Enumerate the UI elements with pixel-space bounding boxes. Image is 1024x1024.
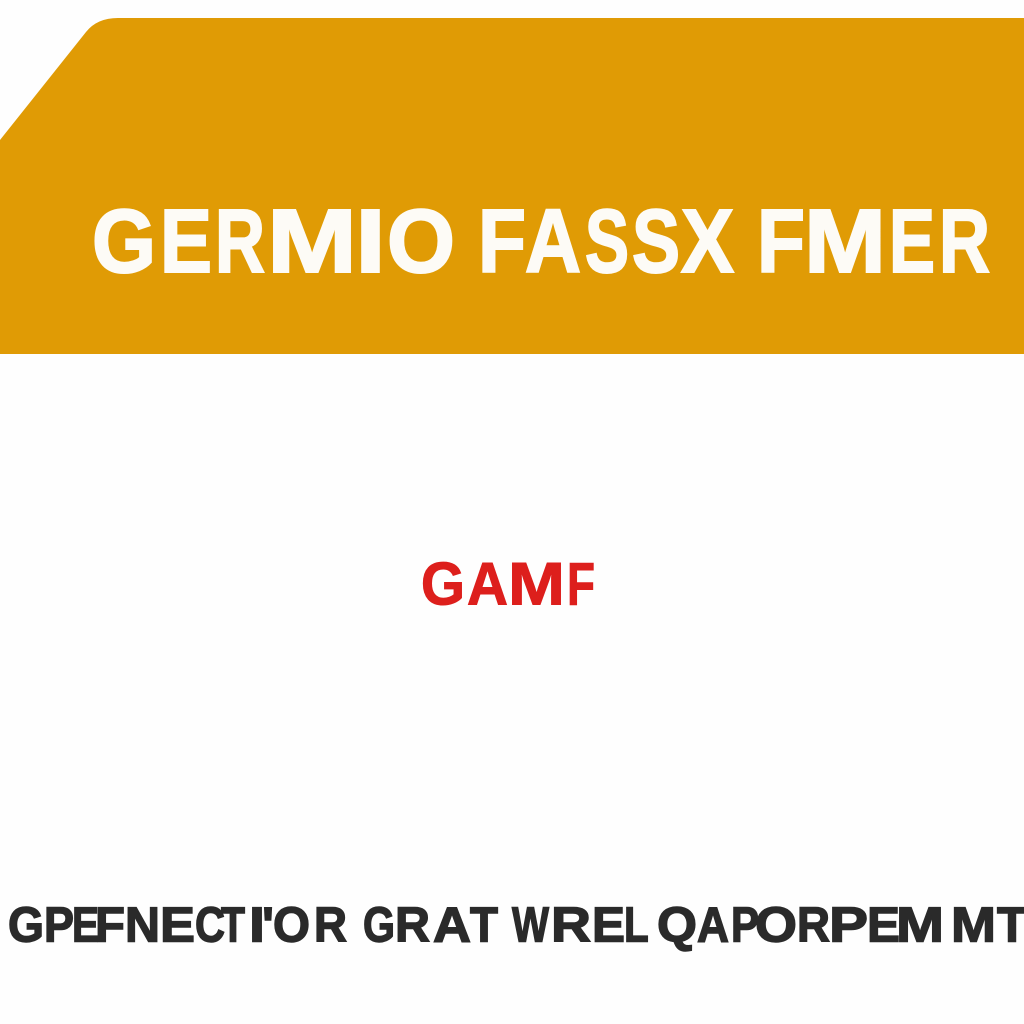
text: red centre label: F: [567, 550, 595, 618]
heading: banner title: A: [525, 192, 581, 292]
text: bottom line: C: [195, 898, 225, 952]
text: bottom line: Q: [657, 898, 697, 952]
text: bottom line: P: [829, 898, 868, 952]
text: bottom line: M: [896, 898, 944, 952]
text: bottom line: E: [592, 898, 625, 952]
text: bottom line: F: [95, 898, 125, 952]
text: bottom line: G: [8, 898, 44, 952]
text: bottom line: O: [755, 898, 797, 952]
heading: banner title: R: [215, 192, 265, 292]
text: bottom line: R: [314, 898, 347, 952]
heading: banner title: E: [889, 192, 935, 292]
text: bottom line: R: [551, 898, 591, 952]
heading: banner title: G: [92, 192, 156, 292]
heading: banner title: M: [267, 192, 357, 292]
text: red centre label: M: [508, 550, 565, 618]
text: bottom line: T: [221, 898, 245, 952]
text: bottom line: W: [512, 898, 549, 952]
heading: banner title: I: [355, 192, 386, 292]
text: bottom line: R: [797, 898, 830, 952]
panel: header banner: [0, 18, 1024, 354]
text: bottom line: R: [395, 898, 430, 952]
text: bottom line: E: [72, 898, 99, 952]
text: bottom line: P: [731, 898, 759, 952]
heading: banner title: S: [632, 192, 680, 292]
text: bottom line: E: [160, 898, 195, 952]
text: bottom line: L: [624, 898, 648, 952]
text: bottom line: M: [951, 898, 996, 952]
heading: banner title: F: [478, 192, 526, 292]
text: red centre label: A: [467, 550, 508, 618]
text: bottom line: A: [697, 898, 729, 952]
text: bottom line: ': [262, 898, 274, 952]
text: bottom line: I: [249, 898, 265, 952]
text: bottom line: O: [273, 898, 310, 952]
heading: banner title: X: [681, 192, 734, 292]
heading: banner title: R: [939, 192, 990, 292]
text: red centre label: G: [421, 550, 465, 618]
text: bottom line: G: [363, 898, 395, 952]
heading: banner title: S: [585, 192, 629, 292]
text: bottom line: N: [125, 898, 160, 952]
heading: banner title: M: [804, 192, 886, 292]
heading: banner title: F: [757, 192, 805, 292]
text: bottom line: A: [433, 898, 471, 952]
text: bottom line: P: [44, 898, 74, 952]
heading: banner title: O: [387, 192, 455, 292]
text: bottom line: E: [867, 898, 900, 952]
text: bottom line: T: [470, 898, 498, 952]
heading: banner title: E: [160, 192, 212, 292]
